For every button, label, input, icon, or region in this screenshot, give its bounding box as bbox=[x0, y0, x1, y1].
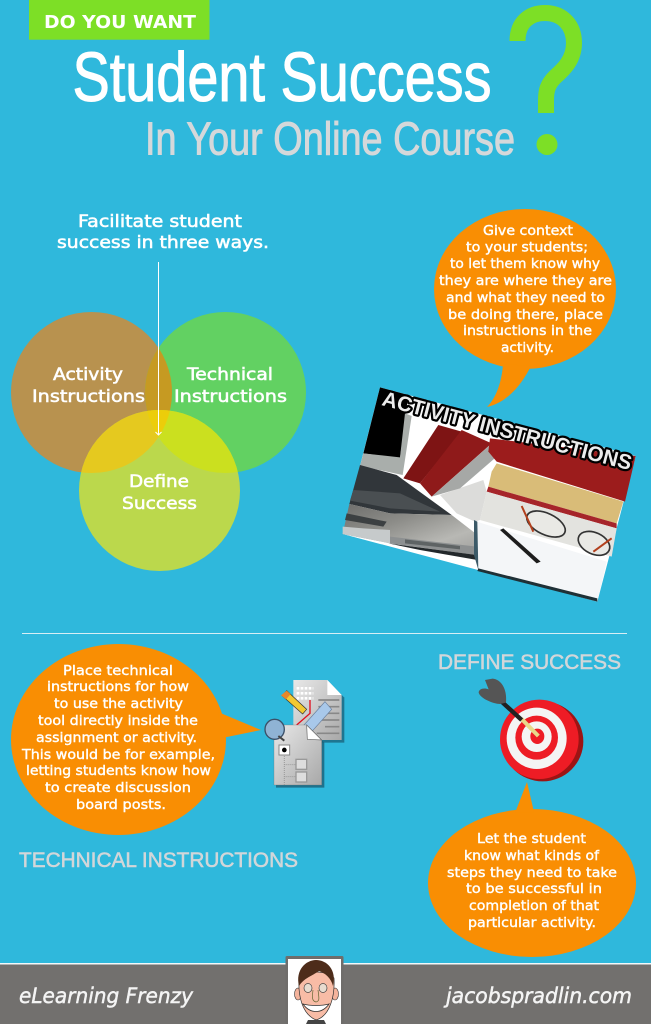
venn label: define success bbox=[122, 472, 197, 514]
venn label: technical instructions: Instructions bbox=[174, 387, 287, 407]
callout: activity instructions: to your students; bbox=[466, 240, 588, 256]
venn label: define success: Success bbox=[122, 494, 197, 514]
title: Student Success bbox=[72, 38, 492, 116]
callout: activity instructions: to let them know why bbox=[450, 256, 600, 272]
callout: define success bbox=[428, 782, 636, 957]
venn label: activity instructions: Activity bbox=[53, 365, 123, 385]
callout: activity instructions: activity. bbox=[501, 340, 554, 356]
banner: do you want: DO YOU WANT bbox=[44, 12, 197, 33]
photo caption: ACTIVITY INSTRUCTIONS bbox=[380, 388, 634, 475]
heading: define success: DEFINE SUCCESS bbox=[438, 651, 621, 674]
intro text bbox=[57, 212, 269, 253]
callout: activity instructions: instructions in the bbox=[463, 323, 592, 339]
arrow: intro to venn bbox=[156, 262, 162, 435]
callout: technical instructions: Place technical bbox=[63, 663, 173, 679]
divider bbox=[22, 633, 627, 634]
footer text: eLearning Frenzy: eLearning Frenzy bbox=[19, 984, 194, 1008]
callout: define success: steps they need to take bbox=[447, 865, 617, 881]
callout: define success: completion of that bbox=[469, 898, 599, 914]
callout: activity instructions: and what they need to bbox=[446, 290, 605, 306]
venn label: define success: Define bbox=[129, 472, 189, 492]
callout: technical instructions: tool directly inside the bbox=[38, 713, 198, 729]
venn label: activity instructions: Instructions bbox=[32, 387, 145, 407]
callout: define success: to be successful in bbox=[466, 881, 602, 897]
banner: do you want bbox=[29, 0, 210, 40]
venn diagram bbox=[11, 312, 306, 571]
callout: technical instructions: This would be for example, bbox=[21, 747, 215, 763]
icon: question mark bbox=[518, 13, 574, 155]
callout: activity instructions: Give context bbox=[483, 223, 573, 239]
footer bbox=[0, 956, 651, 1024]
callout: define success: Let the student bbox=[477, 831, 586, 847]
footer text: website: jacobspradlin.com bbox=[443, 984, 632, 1008]
icon: dartboard with dart bbox=[479, 679, 583, 781]
callout: activity instructions: they are where they are bbox=[439, 273, 612, 289]
venn label: technical instructions bbox=[174, 365, 287, 407]
portrait caricature bbox=[286, 956, 344, 1024]
callout: technical instructions: assignment or activity. bbox=[36, 730, 197, 746]
callout: define success: particular activity. bbox=[468, 915, 596, 931]
callout: technical instructions: board posts. bbox=[76, 797, 166, 813]
callout: technical instructions: to create discussion bbox=[45, 780, 191, 796]
callout: define success: know what kinds of bbox=[464, 848, 600, 864]
callout: technical instructions: to use the activity bbox=[54, 696, 183, 712]
photo: laptop and books bbox=[343, 387, 636, 602]
venn label: technical instructions: Technical bbox=[186, 365, 273, 385]
callout: technical instructions: letting students know how bbox=[26, 763, 211, 779]
callout: technical instructions bbox=[11, 644, 261, 835]
callout: activity instructions bbox=[434, 209, 616, 407]
subtitle: In Your Online Course bbox=[145, 112, 515, 164]
intro text: Facilitate student bbox=[78, 212, 242, 232]
callout: technical instructions: instructions for how bbox=[47, 679, 189, 695]
venn label: activity instructions bbox=[32, 365, 145, 407]
heading: technical instructions: TECHNICAL INSTRUCTIONS bbox=[19, 849, 298, 872]
callout: activity instructions: be doing there, place bbox=[448, 307, 603, 323]
icon: documents with pin, pencil and ruler bbox=[265, 680, 344, 788]
intro text: success in three ways. bbox=[57, 233, 269, 253]
